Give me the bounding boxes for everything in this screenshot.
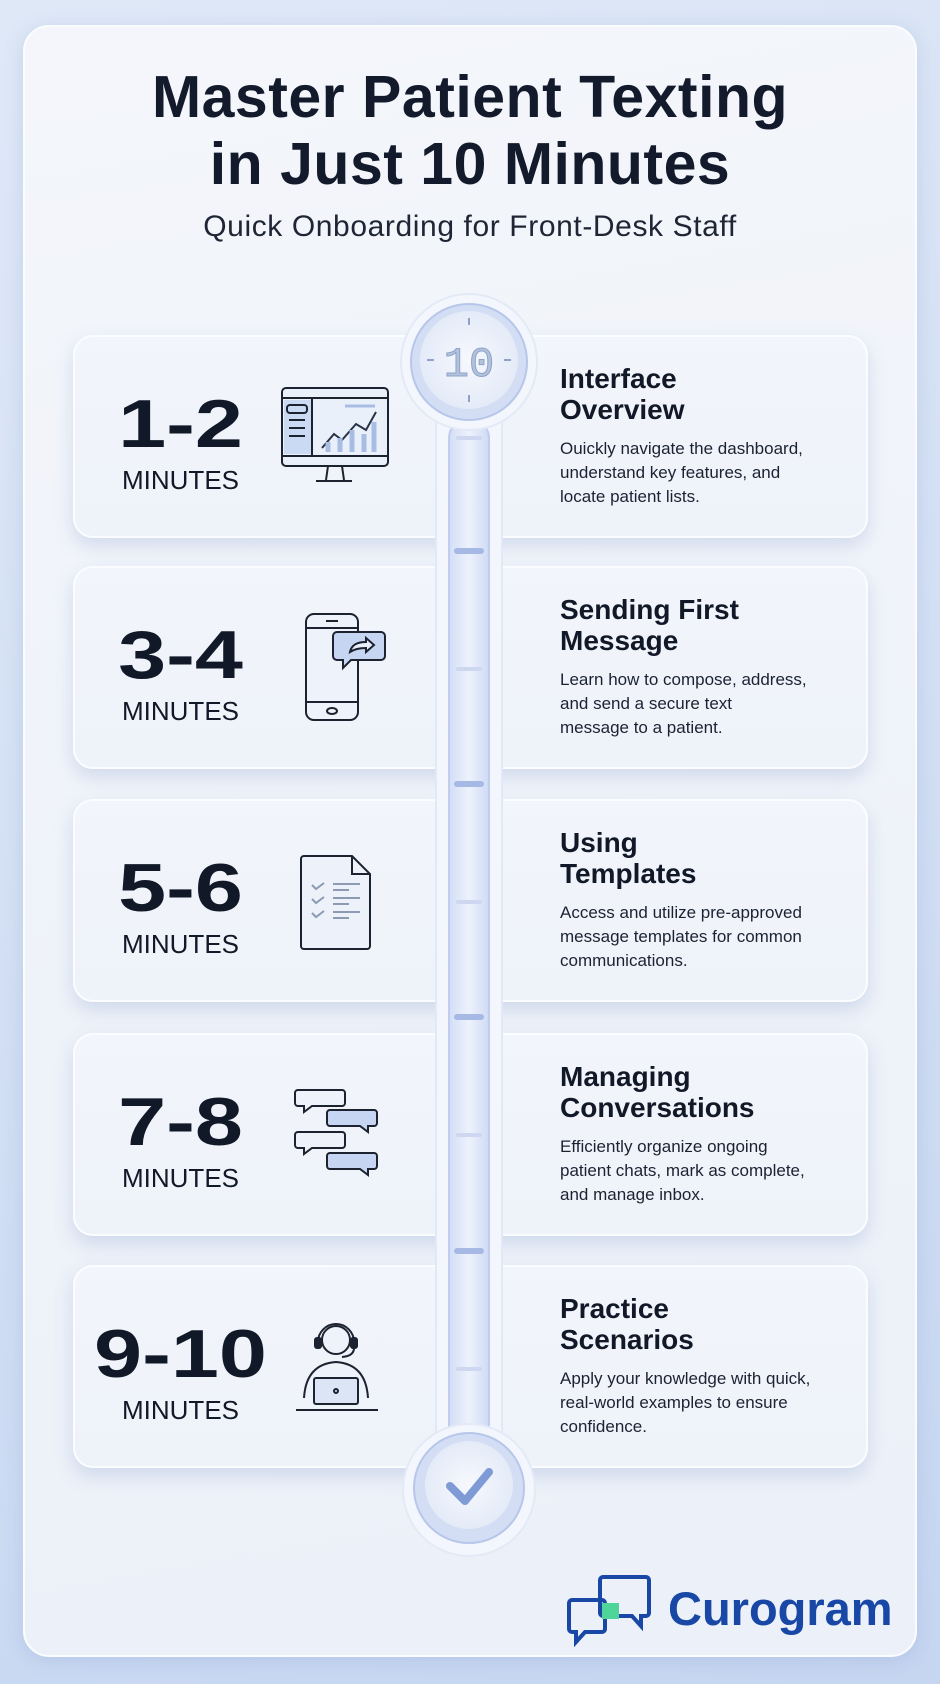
- heading: [560, 594, 739, 656]
- title: Master Patient Texting: [152, 64, 788, 130]
- heading: Managing: [560, 1061, 691, 1092]
- time label: 7-8: [118, 1084, 243, 1160]
- description: locate patient lists.: [560, 487, 700, 506]
- card: 1-2 minutes: [73, 335, 868, 538]
- description: patient chats, mark as complete,: [560, 1161, 805, 1180]
- description: real-world examples to ensure: [560, 1393, 788, 1412]
- description: [560, 1369, 810, 1436]
- description: communications.: [560, 951, 688, 970]
- heading: [560, 1293, 694, 1355]
- icon: conversation bubbles: [295, 1090, 377, 1175]
- icon: support agent: [296, 1324, 378, 1410]
- heading: [560, 363, 685, 425]
- minutes label: MINUTES: [122, 696, 239, 726]
- title: in Just 10 Minutes: [210, 131, 730, 197]
- logo text: Curogram: [668, 1582, 893, 1635]
- heading: Interface: [560, 363, 677, 394]
- heading: Overview: [560, 394, 685, 425]
- top timer bulb: [401, 294, 537, 430]
- bottom check bulb: [403, 1424, 535, 1556]
- card: 9-10 minutes: [73, 1265, 868, 1468]
- description: Learn how to compose, address,: [560, 670, 807, 689]
- heading: Conversations: [560, 1092, 754, 1123]
- card: 5-6 minutes: [73, 799, 868, 1002]
- time label: 1-2: [118, 386, 243, 462]
- subtitle: Quick Onboarding for Front-Desk Staff: [203, 210, 737, 243]
- icon: monitor dashboard: [282, 388, 388, 481]
- heading: Practice: [560, 1293, 669, 1324]
- timeline tube: [436, 380, 502, 1460]
- heading: Templates: [560, 858, 696, 889]
- description: [560, 903, 802, 970]
- description: message to a patient.: [560, 718, 723, 737]
- description: [560, 1137, 805, 1204]
- icon: phone with message: [306, 614, 385, 720]
- minutes label: MINUTES: [122, 1163, 239, 1193]
- description: message templates for common: [560, 927, 802, 946]
- time label: 5-6: [118, 850, 243, 926]
- minutes label: MINUTES: [122, 1395, 239, 1425]
- description: confidence.: [560, 1417, 647, 1436]
- minutes label: MINUTES: [122, 929, 239, 959]
- heading: [560, 1061, 754, 1123]
- card: 7-8 minutes: [73, 1033, 868, 1236]
- description: Access and utilize pre-approved: [560, 903, 802, 922]
- heading: Using: [560, 827, 638, 858]
- time label: 3-4: [118, 617, 243, 693]
- logo: Curogram: [569, 1577, 893, 1642]
- card: 3-4 minutes: [73, 566, 868, 769]
- heading: Sending First: [560, 594, 739, 625]
- description: Efficiently organize ongoing: [560, 1137, 768, 1156]
- description: and manage inbox.: [560, 1185, 705, 1204]
- minutes label: MINUTES: [122, 465, 239, 495]
- description: understand key features, and: [560, 463, 780, 482]
- timer digits: 10: [444, 341, 494, 389]
- description: Ouickly navigate the dashboard,: [560, 439, 803, 458]
- description: [560, 439, 803, 506]
- icon: checklist document: [301, 856, 370, 949]
- heading: [560, 827, 696, 889]
- description: Apply your knowledge with quick,: [560, 1369, 810, 1388]
- heading: Scenarios: [560, 1324, 694, 1355]
- description: [560, 670, 807, 737]
- title: [152, 64, 788, 197]
- heading: Message: [560, 625, 678, 656]
- description: and send a secure text: [560, 694, 732, 713]
- time label: 9-10: [94, 1316, 267, 1392]
